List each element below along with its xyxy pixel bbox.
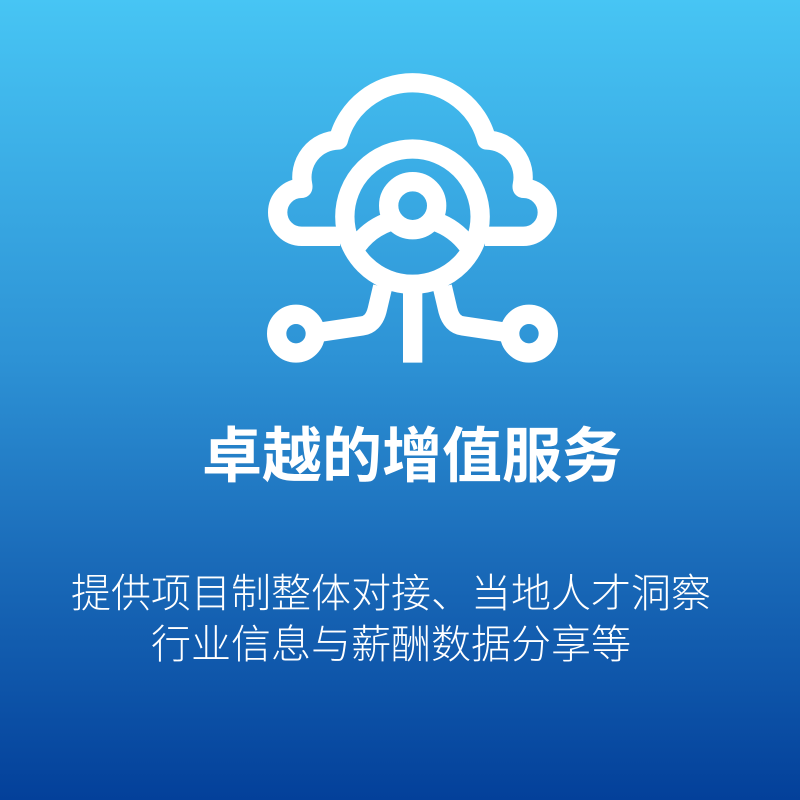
icon: person shoulders [357, 221, 468, 245]
icon: left node [277, 314, 315, 353]
text block: description: 提供项目制整体对接、当地人才洞察 [71, 572, 711, 616]
text block: description [71, 572, 711, 667]
icon: person head [389, 182, 437, 230]
icon: right connector [442, 287, 503, 332]
icon: center stem [384, 290, 442, 363]
heading: 卓越的增值服务 [202, 423, 622, 490]
icon: left connector [322, 287, 383, 332]
text block: description: 行业信息与薪酬数据分享等 [151, 623, 631, 667]
icon: magnifier ring [345, 149, 480, 284]
icon: cloud outline [278, 83, 547, 236]
icon: right node [510, 314, 548, 353]
